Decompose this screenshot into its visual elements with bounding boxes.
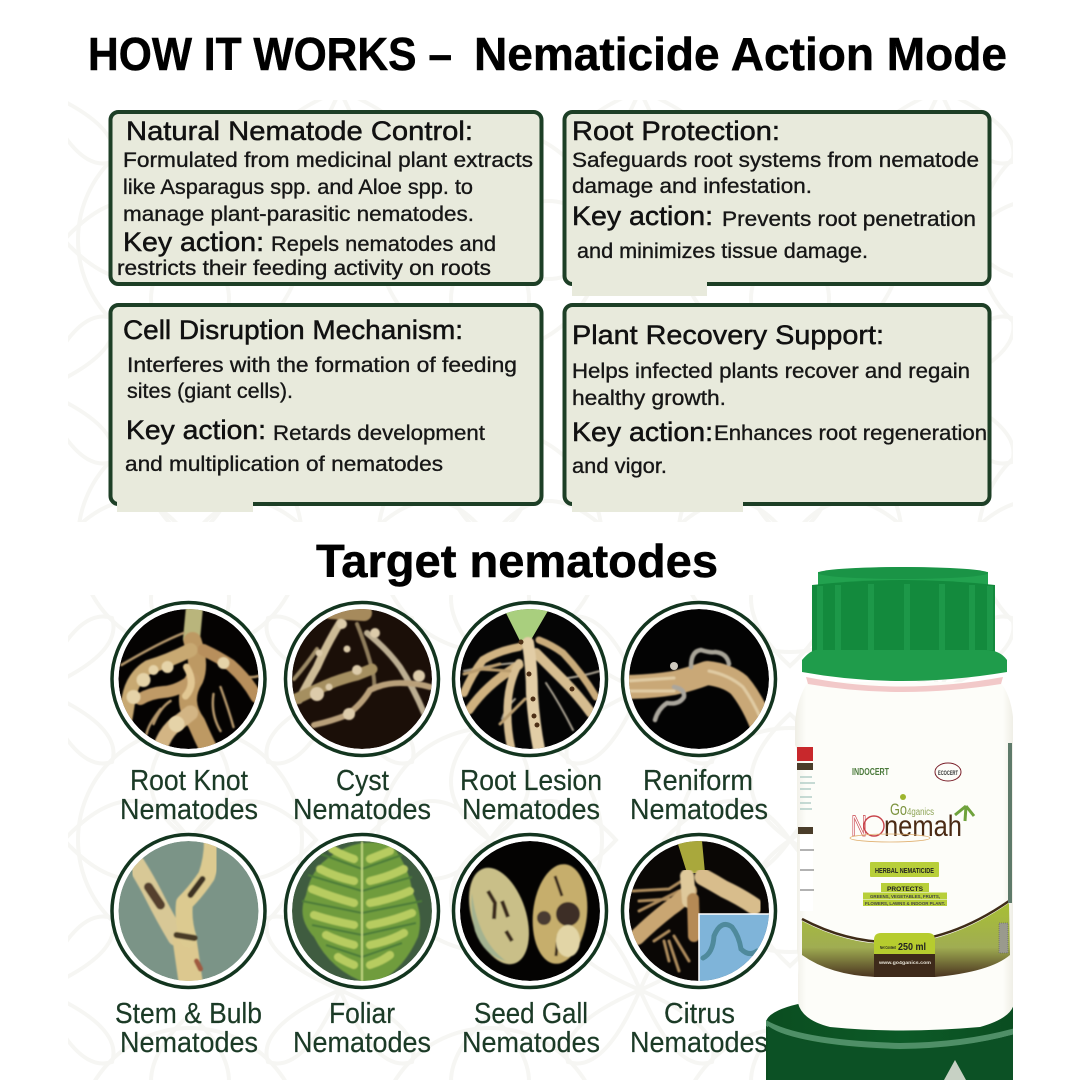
text: plant recovery description: healthy growth. [572,387,726,410]
label: product claims: HERBAL NEMATICIDE [875,868,934,875]
label: seed gall nematodes [462,998,600,1059]
label: brand logo [850,794,974,843]
label: stem and bulb nematodes [115,998,262,1059]
text: plant recovery key action [572,417,987,478]
label: product claims: FLOWERS, LAWNS & INDOOR PLANT. [865,901,945,906]
item: cyst nematodes [286,602,438,826]
cap [802,567,1007,681]
heading: natural nematode control: Natural Nematode Control: [126,116,473,146]
text: cell disruption key action: and multiplication of nematodes [125,453,443,476]
inset: microscope nematode [699,914,771,984]
text: natural nematode control description: like Asparagus spp. and Aloe spp. to [123,176,473,199]
item: citrus nematodes [622,834,776,1059]
title [88,28,1007,80]
text: natural nematode control description: Formulated from medicinal plant extracts [123,149,533,172]
heading: root protection: Root Protection: [572,116,780,146]
text: root protection description [572,149,979,198]
text: plant recovery key action: Key action: [572,417,713,447]
text: natural nematode control description: manage plant-parasitic nematodes. [123,203,474,226]
text: root protection key action: Prevents root penetration [722,208,976,231]
photo: stem and bulb [112,834,265,988]
label: citrus nematodes: Nematodes [630,1027,768,1059]
title: Nematicide Action Mode [474,28,1007,80]
label: stem and bulb nematodes: Nematodes [120,1027,258,1059]
label: citrus nematodes [630,998,768,1059]
label: brand logo: nemah [884,810,962,843]
heading: target nematodes: Target nematodes [316,535,718,587]
item: root knot nematodes [112,602,265,826]
label: net content tag: www.go4ganics.com [878,960,931,965]
label: side panel [797,743,1012,911]
label: foliar nematodes: Foliar [329,998,395,1030]
photo: cyst [286,602,438,756]
label: brand logo: Go [890,800,907,819]
text: natural nematode control key action: restricts their feeding activity on roots [117,257,491,280]
label: foliar nematodes: Nematodes [293,1027,431,1059]
heading: plant recovery support: Plant Recovery Support: [572,320,884,350]
label: foliar nematodes [293,998,431,1059]
text: natural nematode control key action: Repels nematodes and [271,233,496,256]
text: plant recovery key action: Enhances root regeneration [714,422,987,445]
label: stem and bulb nematodes: Stem & Bulb [115,998,262,1030]
label: net content tag [874,933,935,977]
text: plant recovery description [572,360,970,410]
label: root lesion nematodes [460,765,602,826]
label: bottom swoosh [802,903,1010,977]
text: root protection key action: and minimizes tissue damage. [577,240,868,263]
photo: seed gall [454,834,606,988]
title: HOW IT WORKS – [88,28,452,80]
text: cell disruption key action: Retards development [273,422,485,445]
label: product claims: PROTECTS [887,886,924,893]
label: reniform nematodes: Reniform [643,765,753,797]
panel: natural nematode control [110,112,542,284]
label: seed gall nematodes: Seed Gall [474,998,588,1030]
item: foliar nematodes [286,834,438,1059]
photo: root knot [112,602,265,756]
label: seed gall nematodes: Nematodes [462,1027,600,1059]
photo: foliar [286,834,438,988]
text: plant recovery description: Helps infected plants recover and regain [572,360,970,383]
text: root protection description: Safeguards root systems from nematode [572,149,979,172]
label: cyst nematodes [293,765,431,826]
heading: cell disruption mechanism: Cell Disruption Mechanism: [123,315,463,345]
text: root protection key action: Key action: [572,201,713,231]
label: net content tag: 250 ml [898,942,926,953]
item: seed gall nematodes [454,834,606,1059]
panel: root protection [564,112,990,296]
label: product claims [863,862,947,906]
text: natural nematode control description [123,149,533,226]
label: citrus nematodes: Citrus [664,998,735,1030]
icon: pedestal triangle [944,1060,966,1080]
panel: cell disruption mechanism [110,305,542,512]
text: root protection description: damage and infestation. [572,175,812,198]
bottle body [795,682,1014,1030]
text: root protection key action [572,201,976,263]
label: root knot nematodes: Nematodes [120,794,258,826]
photo: reniform [622,602,776,756]
text: cell disruption description: sites (giant cells). [127,380,293,403]
label: product claims: GREENS, VEGETABLES, FRUITS, [870,894,940,899]
label: root knot nematodes: Root Knot [130,765,248,797]
label: net content tag: Net Content [880,945,896,950]
text: cell disruption description: Interferes with the formation of feeding [127,354,517,377]
label: root knot nematodes [120,765,258,826]
label: certification marks [852,763,961,781]
item: stem and bulb nematodes [112,834,265,1059]
item: root lesion nematodes [454,602,606,826]
label: certification marks: INDOCERT [852,766,889,778]
label: reniform nematodes [630,765,768,826]
label: cyst nematodes: Cyst [336,765,389,797]
text: natural nematode control key action: Key action: [123,227,264,257]
label: reniform nematodes: Nematodes [630,794,768,826]
label: brand logo: 4ganics [907,807,934,818]
label: cyst nematodes: Nematodes [293,794,431,826]
panel: plant recovery support [564,305,990,512]
text: cell disruption key action [125,415,485,476]
bottle neck ring [806,677,1003,692]
text: plant recovery key action: and vigor. [572,455,667,478]
item: reniform nematodes [622,602,776,826]
label: certification marks: ECOCERT [938,771,958,777]
icon: qr code [999,923,1008,953]
text: cell disruption key action: Key action: [126,415,266,445]
label: brand logo: N [851,810,867,843]
text: natural nematode control key action [117,227,496,280]
pedestal [766,1004,1013,1080]
photo: citrus [622,834,776,988]
label: root lesion nematodes: Root Lesion [460,765,602,797]
text: cell disruption description [127,354,517,403]
photo: root lesion [454,602,606,756]
label: root lesion nematodes: Nematodes [462,794,600,826]
product bottle [795,567,1014,1030]
background pattern [68,100,1013,1080]
